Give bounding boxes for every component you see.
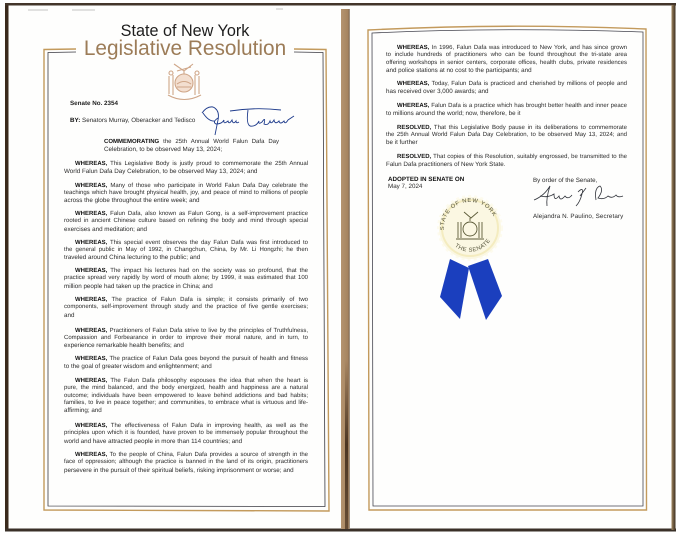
text block: whereas first introduced: traveled around China lecturing to the public; and xyxy=(64,254,200,261)
text block: whereas Falun Gong: WHEREAS, Falun Dafa, also known as Falun Gong, is a self-improvement practice xyxy=(75,211,308,217)
text block: whereas first introduced: WHEREAS, This special event observes the day Falun Dafa was first introduced to xyxy=(75,240,308,246)
text block: resolved commemorate: the 25th Annual World Falun Dafa Day Celebration, to be observed May 13, 2024; and xyxy=(386,132,627,138)
text block: whereas simple practice: and xyxy=(64,312,74,319)
text block: resolved commemorate: RESOLVED, That this Legislative Body pause in its deliberations to commemorate xyxy=(397,124,627,130)
text block: whereas impact: practice spread very rapidly by word of mouth alone; by 1999, it was estimated that 100 xyxy=(64,275,308,281)
text block: whereas practitioners: Compassion and Forbearance in order to improve their moral nature, and in turn, to xyxy=(64,335,308,341)
text block: whereas impact: million people had taken up the practice in China; and xyxy=(64,283,213,290)
signature: Alejandra N. Paulino xyxy=(534,186,624,206)
text block: whereas practitioners xyxy=(64,328,308,349)
senate number: Senate No. 2354 xyxy=(70,100,118,107)
signature: James Tedisco xyxy=(202,106,294,136)
text block: whereas effectiveness: world and have attracted people in more than 114 countries; and xyxy=(64,438,242,445)
adoption date: May 7, 2024 xyxy=(388,183,422,190)
sponsors: BY: Senators Murray, Oberacker and Tedisco xyxy=(70,117,195,124)
left gold border xyxy=(44,49,329,511)
text block: whereas impact: WHEREAS, The impact his lectures had on the society was so profound, that the xyxy=(75,268,308,274)
seal disc xyxy=(437,195,503,261)
text block: whereas simple practice: WHEREAS, The practice of Falun Dafa is simple; it consists primarily of two xyxy=(75,297,308,303)
text block: whereas New York 1996: and police stations at no cost to the participants; and xyxy=(386,67,532,74)
text block: whereas simple practice xyxy=(64,296,308,319)
text block: whereas philosophy xyxy=(64,378,308,414)
text block: whereas beyond health: WHEREAS, The practice of Falun Dafa goes beyond the pursuit of health and fitness xyxy=(75,356,308,362)
text block: whereas better health: to millions around the world; now, therefore, be it xyxy=(386,110,520,117)
text block: whereas participants xyxy=(64,182,308,204)
adoption date: ADOPTED IN SENATE ON xyxy=(388,176,464,183)
text block: whereas practitioners: WHEREAS, Practitioners of Falun Dafa strive to live by the principles of Truthfulness, xyxy=(75,328,308,334)
text block: whereas people of China: face of oppression; although the practice is banned in the land of its origin, practitioners xyxy=(64,459,308,465)
text block: commemorating xyxy=(104,138,279,153)
seal disc: THE SENATE xyxy=(456,238,490,252)
text block: whereas philosophy: pure, the mind balanced, and the body energized, health and happiness are a natural xyxy=(64,385,308,391)
text block: whereas philosophy: WHEREAS, The Falun Dafa philosophy espouses the idea that when the heart is xyxy=(75,378,308,384)
text block: whereas better health: WHEREAS, Falun Dafa is a practice which has brought better health and inner peace xyxy=(397,103,627,109)
secretary name: Alejandra N. Paulino, Secretary xyxy=(533,213,623,220)
icon: gold senate seal with blue ribbon xyxy=(437,195,503,320)
text block: whereas Falun Gong xyxy=(64,210,308,233)
text block: resolved copies: RESOLVED, That copies of this Resolution, suitably engrossed, be transmitted to the xyxy=(397,154,627,160)
text block: commemorating: COMMEMORATING the 25th Annual World Falun Dafa Day xyxy=(104,139,279,145)
text block: whereas participants: across the globe throughout the entire week; and xyxy=(64,197,200,204)
text block: whereas philosophy: outcome; individuals have been empowered to leave behind addictions and bad habits; xyxy=(64,393,308,399)
text block: commemorating: Celebration, to be observed May 13, 2024; xyxy=(104,146,222,153)
text block: whereas impact xyxy=(64,268,308,290)
text block: whereas today: WHEREAS, Today, Falun Dafa is practiced and cherished by millions of people and xyxy=(397,81,627,87)
text block: whereas philosophy: affirming; and xyxy=(64,407,102,414)
text block: whereas today: has received over 3,000 awards; and xyxy=(386,88,488,95)
adoption date xyxy=(388,176,464,190)
text block: whereas participants: WHEREAS, Many of those who participate in World Falun Dafa Day celebrate the xyxy=(75,182,308,188)
text block: whereas legislative body: WHEREAS, This Legislative Body is justly proud to commemorate the 25th Annual xyxy=(75,161,308,167)
text block: resolved commemorate xyxy=(386,124,627,146)
text block: whereas New York 1996 xyxy=(386,44,627,74)
text block: resolved copies: Falun Dafa practitioners of New York State. xyxy=(386,161,506,168)
text block: whereas philosophy: families, to live in peace together; and communities, to embrace what is virtuous and life- xyxy=(64,400,308,406)
text block: whereas New York 1996: WHEREAS, In 1996, Falun Dafa was introduced to New York, and has since grown xyxy=(397,45,627,51)
by order of the senate: By order of the Senate, xyxy=(533,177,597,184)
right gold border xyxy=(368,26,646,510)
text block: whereas first introduced: the general public in May of 1992, in Changchun, China, by Mr. Li Hongzhi; he then xyxy=(64,247,308,253)
text block: whereas Falun Gong: rooted in ancient Chinese culture based on refining the body and mind through special xyxy=(64,218,308,224)
text block: whereas beyond health xyxy=(64,356,308,370)
text block: whereas first introduced xyxy=(64,240,308,261)
text block: resolved copies xyxy=(386,154,627,168)
heading: Legislative Resolution: Legislative Resolution xyxy=(84,37,286,60)
blue ribbon xyxy=(440,259,502,320)
text block: whereas New York 1996: offering workshops in senior centers, corporate offices, health clubs, private residences xyxy=(386,60,627,66)
text block: whereas people of China: persevere in the pursuit of their spiritual beliefs, risking imprisonment or worse; and xyxy=(64,467,294,474)
text block: whereas better health xyxy=(386,102,627,117)
text block: whereas practitioners: experience remarkable health benefits; and xyxy=(64,342,184,349)
text block: whereas effectiveness xyxy=(64,422,308,445)
text block: whereas people of China: WHEREAS, To the people of China, Falun Dafa provides a source of strength in the xyxy=(75,452,308,458)
text block: whereas beyond health: to the goal of greater wisdom and enlightenment; and xyxy=(64,363,212,370)
text block: whereas legislative body xyxy=(64,160,308,175)
text block: whereas effectiveness: WHEREAS, The effectiveness of Falun Dafa in improving health, as well as the xyxy=(75,423,308,429)
text block: whereas simple practice: components, self-improvement through study and the practice of five gentle exercises; xyxy=(64,304,308,310)
text block: whereas Falun Gong: exercises and meditation; and xyxy=(64,226,147,233)
seal disc: STATE OF NEW YORK xyxy=(440,198,497,230)
text block: whereas legislative body: World Falun Dafa Day Celebration, to be observed May 13, 2024; and xyxy=(64,168,257,175)
text block: whereas New York 1996: to include hundreds of practitioners who can be found throughout the tri-state area xyxy=(386,52,627,58)
text block: resolved commemorate: be it further xyxy=(386,139,418,146)
text block: whereas people of China xyxy=(64,452,308,474)
icon: New York state crest xyxy=(168,64,202,100)
title: State of New York: State of New York xyxy=(121,22,249,40)
text block: whereas today xyxy=(386,80,627,95)
text block: whereas participants: teachings which have brought physical health, joy, and peace of mind to millions of people xyxy=(64,190,308,196)
text block: whereas effectiveness: principles upon which it is founded, have proven to be immensely popular throughout the xyxy=(64,430,308,436)
